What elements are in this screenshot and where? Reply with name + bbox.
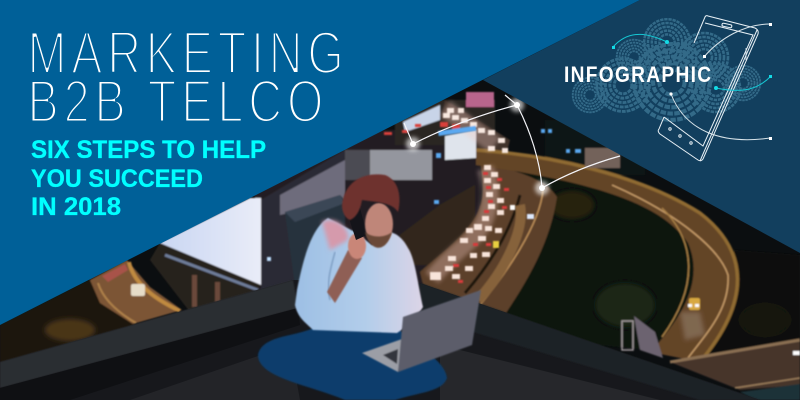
smartphone at ear	[347, 208, 367, 240]
title: MARKETING	[28, 20, 348, 87]
left highway curve	[90, 260, 182, 324]
panel: blue title triangle	[0, 0, 640, 325]
shirt	[295, 218, 423, 333]
icon: cloud of data rings	[573, 19, 760, 120]
overpass road and right sweep	[476, 150, 738, 362]
beard	[365, 232, 392, 248]
subtitle: IN 2018	[31, 193, 121, 221]
title	[28, 20, 348, 135]
large billboard	[160, 198, 261, 285]
traffic lights	[267, 108, 581, 283]
lower right road	[670, 340, 800, 400]
network nodes and lines	[404, 95, 620, 195]
shoulder highlight	[322, 220, 348, 250]
face	[365, 203, 393, 245]
city backdrop	[255, 100, 645, 300]
laptop	[362, 290, 481, 372]
left buildings	[150, 243, 261, 312]
forearm	[327, 250, 362, 303]
icon: smartphone outline	[658, 16, 758, 161]
highway with traffic	[420, 100, 557, 322]
subtitle	[31, 136, 266, 221]
hand	[348, 233, 366, 259]
gantry sign	[622, 316, 663, 358]
hair	[342, 174, 399, 220]
subtitle: YOU SUCCEED	[31, 165, 203, 193]
subtitle: SIX STEPS TO HELP	[31, 136, 266, 164]
billboards and buildings mid-city	[403, 92, 620, 168]
rooftop parapet	[0, 280, 760, 400]
connector lines and nodes	[612, 23, 772, 140]
panel: navy infographic triangle	[483, 0, 800, 253]
man	[258, 174, 481, 400]
sleeve fold	[328, 252, 335, 300]
title: B2B TELCO	[28, 68, 328, 135]
trees	[0, 170, 800, 375]
heading: INFOGRAPHIC: INFOGRAPHIC	[564, 63, 712, 87]
jeans	[258, 328, 447, 400]
